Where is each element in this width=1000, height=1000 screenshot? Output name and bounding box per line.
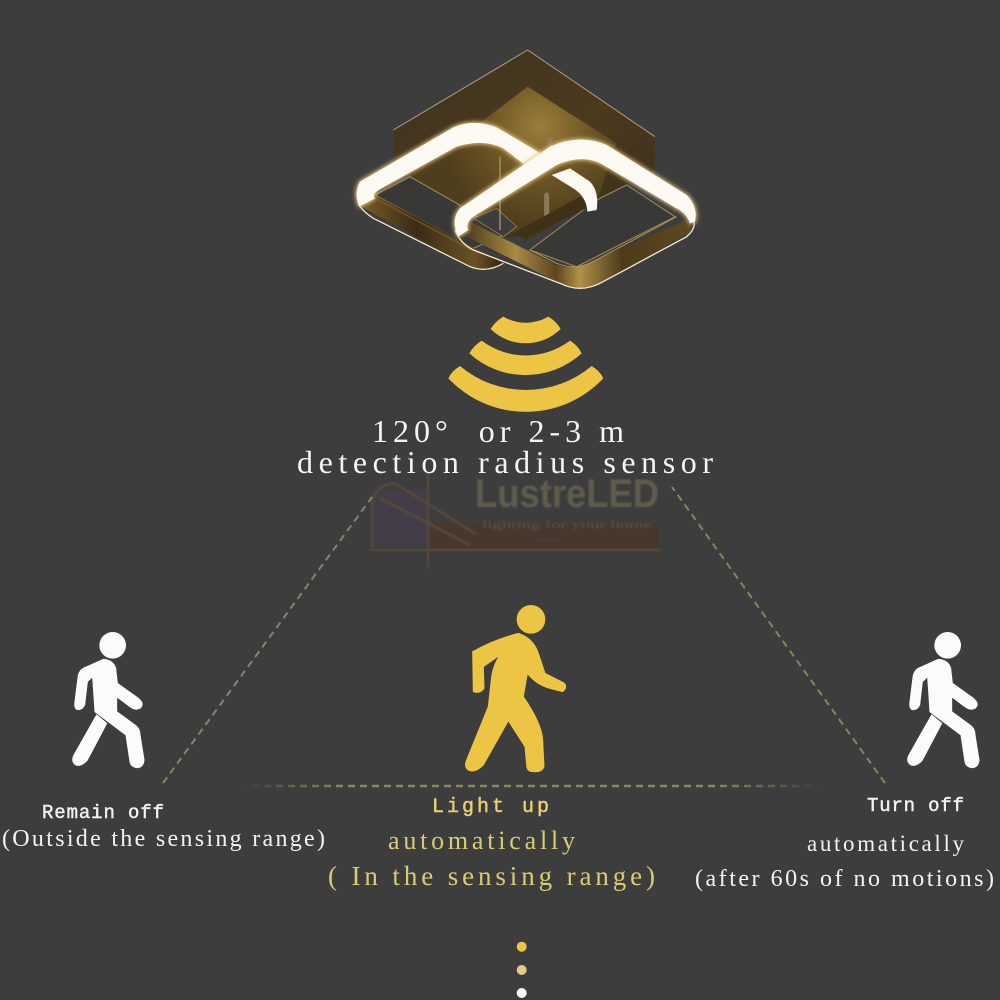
icon: sensor waves	[448, 317, 603, 412]
icon: yellow person centre	[466, 605, 566, 772]
lamp windows	[375, 177, 503, 248]
right status text: automatically	[807, 831, 964, 856]
watermark logo	[370, 470, 660, 568]
right status text: (after 60s of no motions)	[695, 866, 994, 892]
centre status text: ( In the sensing range)	[328, 861, 655, 891]
lamp base plate	[393, 50, 655, 240]
left status text	[2, 802, 325, 852]
left status text: (Outside the sensing range)	[2, 826, 325, 852]
left ring	[356, 123, 597, 269]
right status text: Turn off	[867, 795, 964, 817]
centre status text: automatically	[388, 826, 575, 855]
decorative dots	[517, 942, 527, 998]
watermark logo: lighting for your home	[482, 520, 653, 531]
lamp posts	[547, 140, 550, 218]
right status text	[695, 795, 994, 892]
icon: white person right	[908, 632, 979, 768]
sensor heading	[297, 413, 713, 480]
dashed sensing range lines	[163, 487, 885, 786]
centre status text: Light up	[432, 796, 549, 819]
icon: white person left	[73, 632, 144, 768]
watermark logo: LustreLED	[475, 472, 659, 516]
sensor heading: 120° or 2-3 m	[372, 413, 624, 449]
ceiling lamp	[356, 50, 696, 288]
watermark logo: - - - - -	[538, 535, 560, 544]
left status text: Remain off	[42, 802, 164, 824]
centre status text	[328, 796, 655, 891]
sensor heading: detection radius sensor	[297, 444, 713, 480]
right ring	[455, 140, 696, 288]
